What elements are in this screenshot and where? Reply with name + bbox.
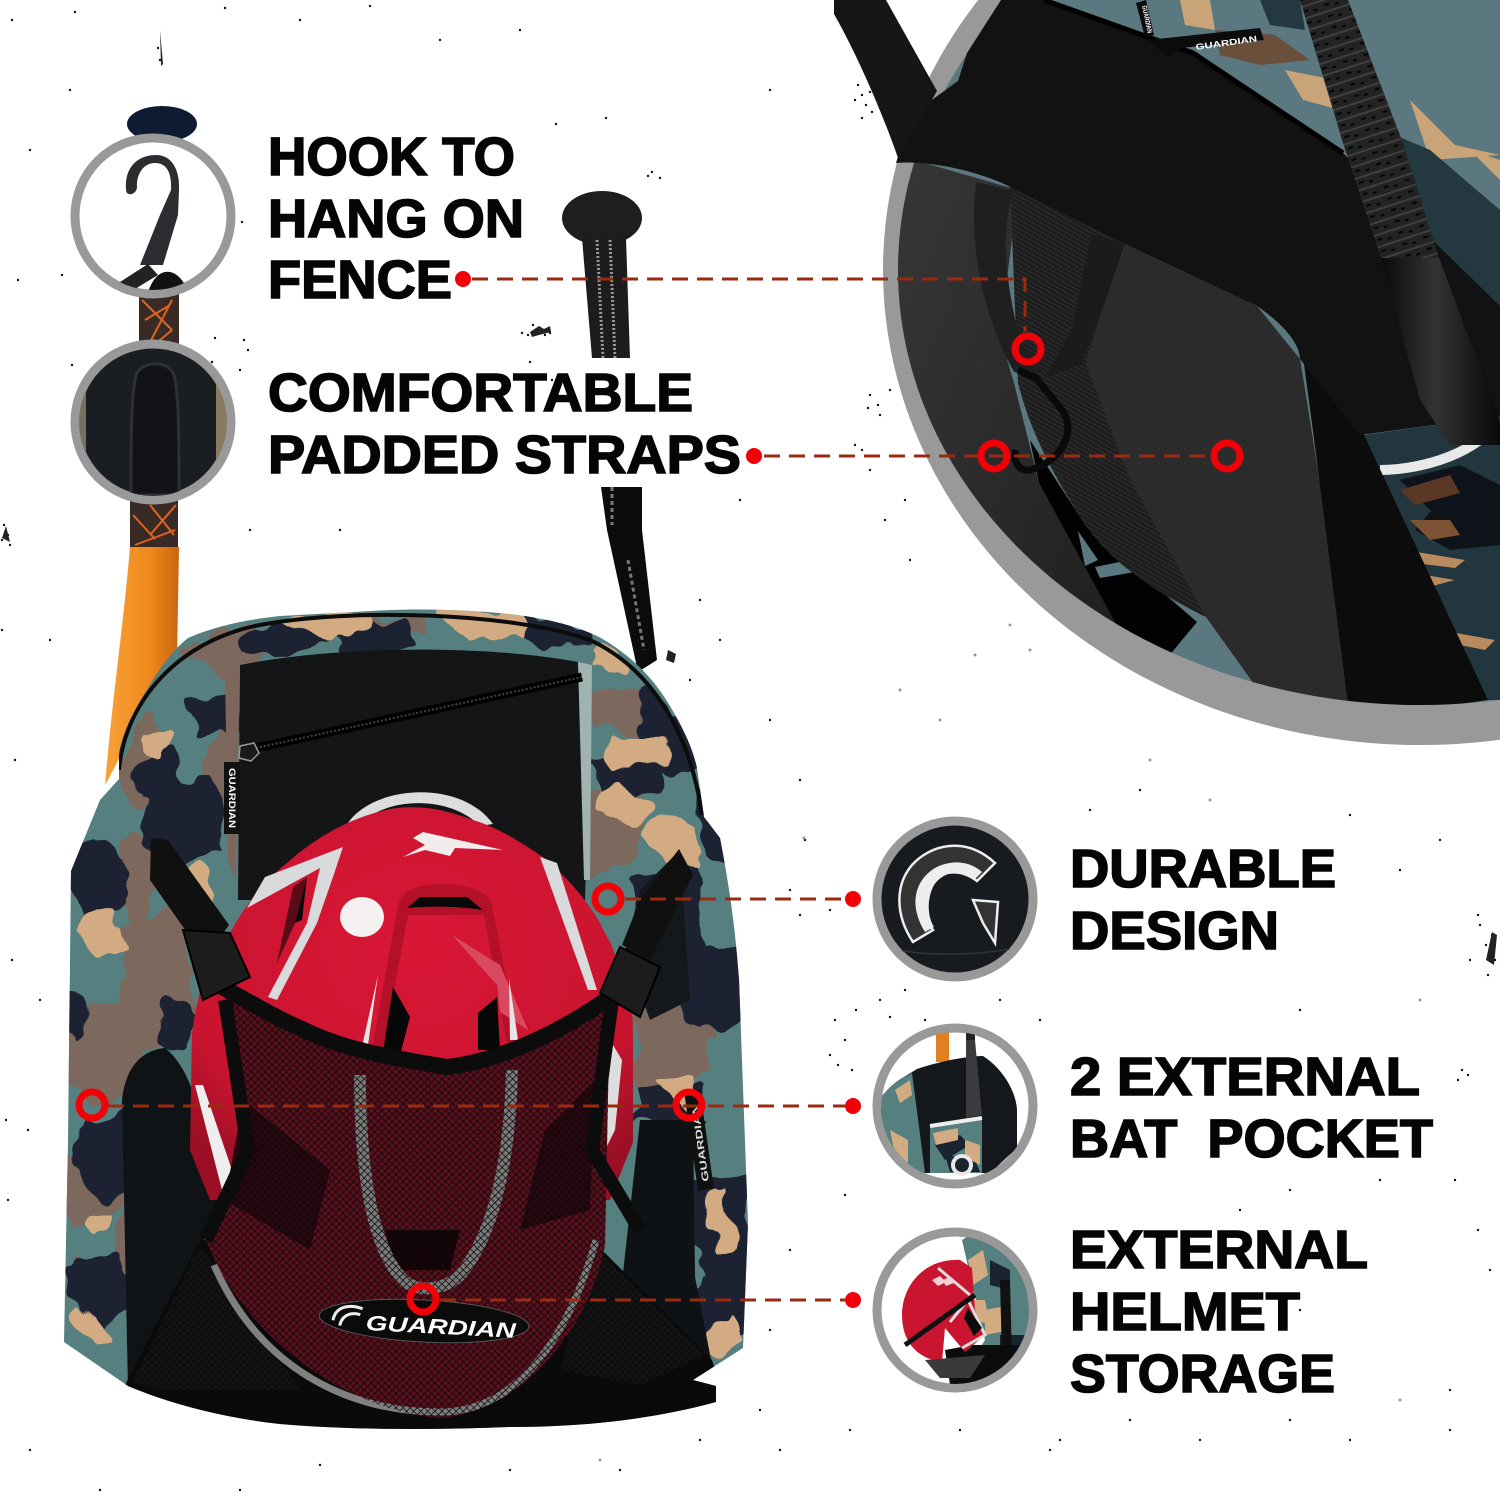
right padded strap [1086, 244, 1356, 712]
black bat behind backpack [562, 191, 657, 672]
left side vent [277, 877, 307, 963]
leader line: hook [455, 271, 1041, 362]
zipper pull tag [224, 743, 259, 834]
side tag: GUARDIAN [690, 1103, 712, 1182]
helmet [190, 807, 633, 1200]
title: hook to hang on fence: HANG ON [268, 189, 524, 249]
title: external helmet storage: HELMET [1070, 1282, 1300, 1342]
leader line: bat pocket [79, 1092, 861, 1118]
right bat barrel [1381, 258, 1500, 445]
title: comfortable padded straps: PADDED STRAPS [268, 425, 741, 485]
zipper tag on detail: GUARDIAN [1140, 5, 1153, 34]
fabric base [60, 600, 760, 1440]
inset: helmet storage [877, 1232, 1033, 1388]
left bat above detail [834, 0, 937, 158]
front zip pocket [238, 650, 589, 900]
outer zipper seam [119, 615, 702, 815]
mini helmet [902, 1260, 985, 1362]
right strap and buckle [600, 849, 693, 1017]
camouflage fabric [60, 614, 750, 1348]
front vents [383, 987, 410, 1055]
top vent [372, 884, 520, 1050]
mini backpack [880, 1056, 1017, 1173]
title: hook to hang on fence: FENCE [268, 250, 452, 310]
inset: bat pocket [877, 1028, 1033, 1184]
mesh shoulder band [1010, 185, 1206, 617]
black mesh panel [1304, 364, 1488, 720]
title: external helmet storage: STORAGE [1070, 1344, 1335, 1404]
helmet stripes [247, 847, 343, 1000]
hook icon [126, 155, 179, 265]
strap mesh [131, 364, 179, 495]
helmet dot [340, 897, 384, 937]
zipper [256, 677, 582, 748]
leader line: helmet [410, 1286, 861, 1312]
camo top [1180, 0, 1500, 320]
right bat grip [1300, 0, 1439, 258]
lower right black panel [620, 1120, 712, 1365]
black gap [1030, 440, 1197, 663]
title: comfortable padded straps [268, 363, 741, 485]
camo lower right [1364, 416, 1500, 700]
grey ring [883, 0, 1500, 745]
title: external helmet storage: EXTERNAL [1070, 1220, 1368, 1280]
title: hook to hang on fence: HOOK TO [268, 127, 515, 187]
right strap loop [1044, 234, 1125, 378]
title: 2 external bat pocket: BAT POCKET [1070, 1109, 1433, 1169]
backpack [60, 600, 760, 1440]
elastic rim [222, 987, 610, 1067]
hook [1015, 370, 1068, 470]
title: external helmet storage [1070, 1220, 1368, 1404]
title: durable design: DURABLE [1070, 839, 1336, 899]
black bag top [896, 0, 1500, 435]
title: comfortable padded straps: COMFORTABLE [268, 363, 693, 423]
side tag [684, 1090, 714, 1191]
orange bat behind insets [105, 106, 197, 785]
left padded panel [898, 162, 1116, 624]
dark upper right gusset [625, 850, 690, 1020]
guardian badge: GUARDIAN [365, 1312, 517, 1343]
title: durable design: DESIGN [1070, 901, 1279, 961]
bottom base [125, 1240, 716, 1429]
mesh pocket [206, 987, 640, 1418]
title: 2 external bat pocket [1070, 1047, 1433, 1169]
left strap and buckle [150, 838, 250, 1000]
inset: durable logo [877, 821, 1033, 977]
inset: padded straps [75, 344, 231, 500]
bat knob [127, 106, 197, 142]
inset: hook [75, 138, 231, 294]
leader line: durable [595, 886, 861, 912]
logo arc behind helmet [346, 792, 493, 826]
leader line: straps [746, 443, 1240, 469]
title: 2 external bat pocket: 2 EXTERNAL [1070, 1047, 1420, 1107]
guardian badge [318, 1295, 530, 1347]
left strap loop [974, 182, 1044, 373]
zipper pull tag: GUARDIAN [226, 768, 237, 828]
center panel highlight [452, 935, 528, 1030]
spartan helmet logo [899, 846, 995, 942]
mini camo pack [962, 1237, 1029, 1378]
callout detail: back of bag [834, 0, 1500, 745]
zipper tag on detail [1136, 0, 1264, 58]
title: hook to hang on fence [268, 127, 524, 310]
zipper tag on detail: GUARDIAN [1195, 33, 1258, 52]
title: durable design [1070, 839, 1336, 961]
lower left black panel [122, 1048, 217, 1387]
